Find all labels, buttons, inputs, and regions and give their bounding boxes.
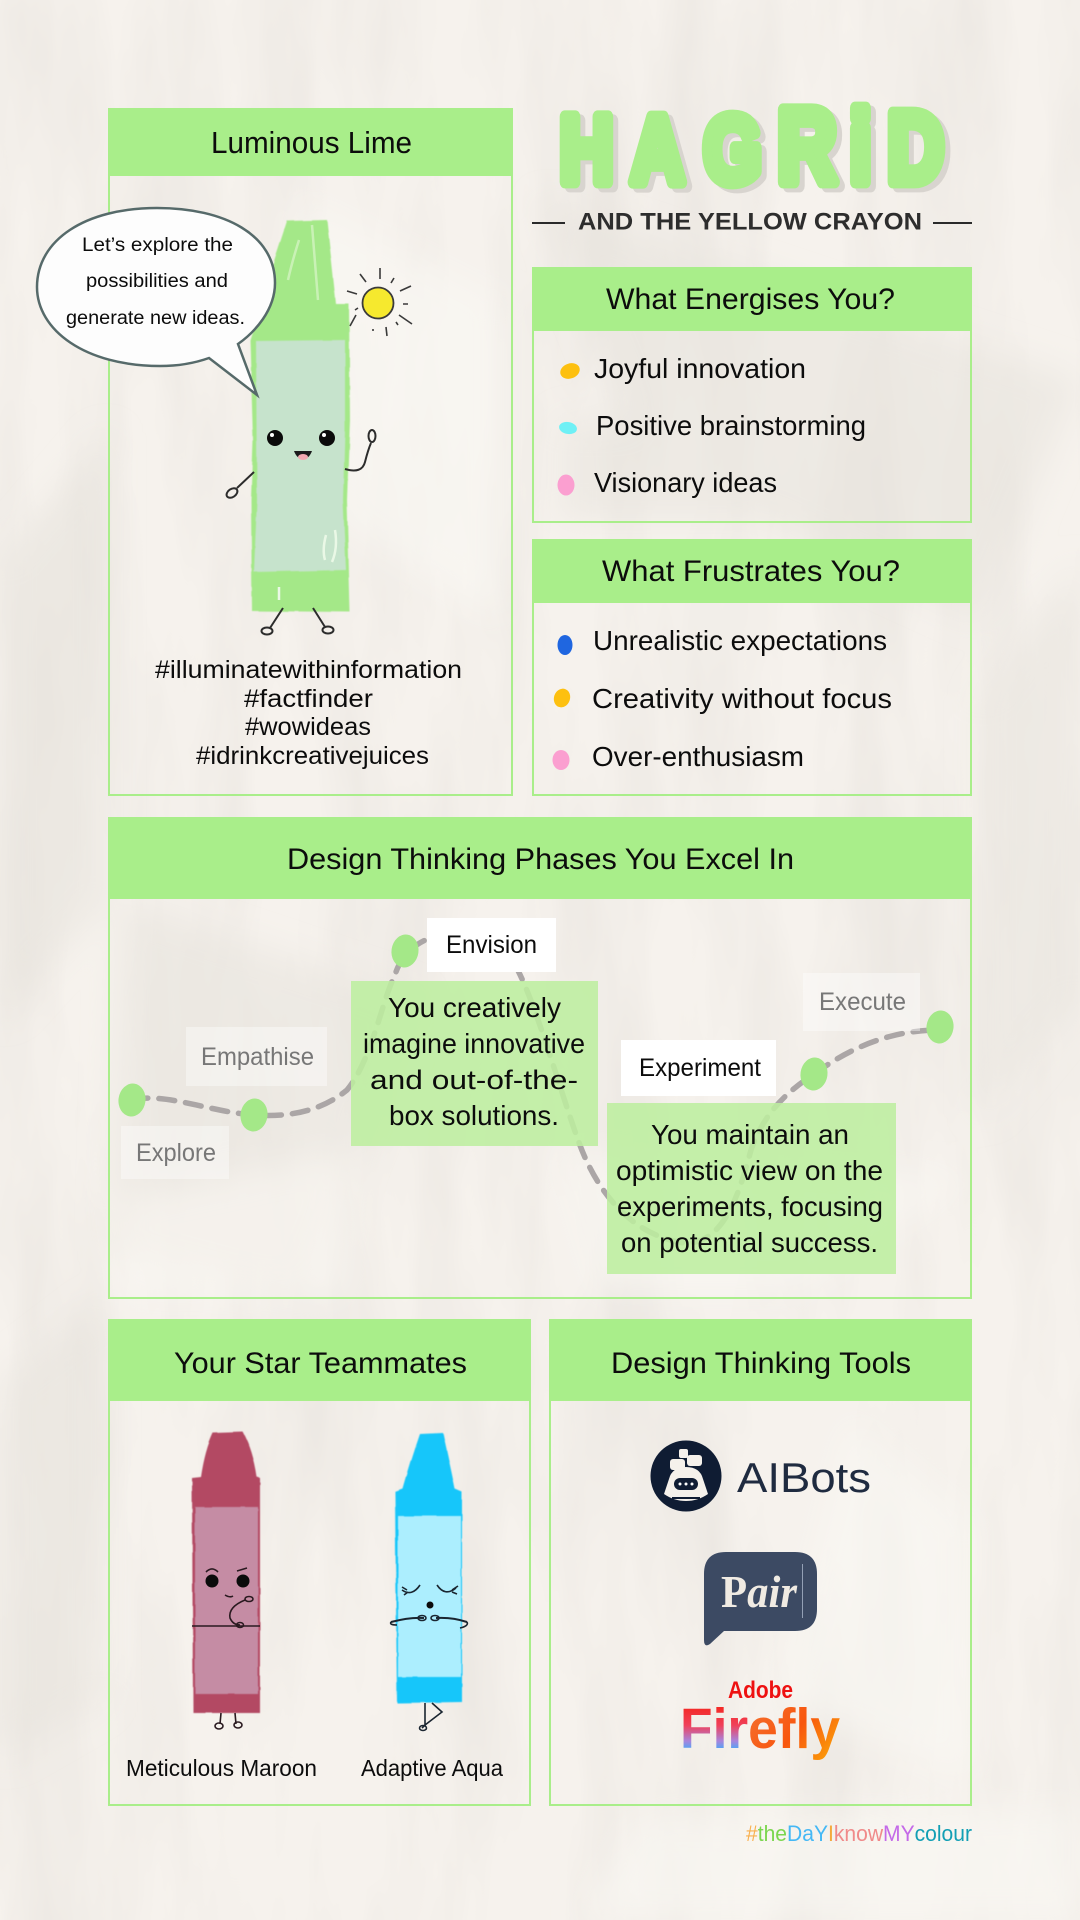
heading: tools [549,1319,972,1401]
text block: experiment description: You maintain an [651,1119,849,1150]
step: Experiment [621,1040,830,1096]
heading: energises [532,267,972,331]
panel: What Frustrates You [532,539,972,795]
text block: envision description: imagine innovative [363,1028,585,1059]
heading: energises: What Energises You? [606,283,895,316]
title: HAGRiD: R [777,87,837,204]
panel: Your Star Teammates [108,1319,531,1805]
logo: AIBots [650,1440,871,1512]
title: HAGRiD: i [849,91,872,204]
title: HAGRiD: G [704,97,761,203]
step: Execute [803,973,956,1045]
step: Envision [389,918,556,972]
callout: speech bubble: possibilities and [86,271,228,292]
character: lime crayon [225,220,376,634]
list: frustrates items [551,625,892,772]
logo: Adobe Firefly: Adobe [728,1677,793,1704]
logo: Pair: Pair [721,1566,798,1617]
list: energises items: Positive brainstorming [596,410,866,441]
logo: Pair [704,1552,817,1645]
heading: frustrates [532,539,972,603]
logo: AIBots: AIBots [737,1454,871,1501]
list: energises items: Joyful innovation [594,353,806,384]
title: HAGRiD: H [560,97,613,203]
text block: envision description: and out-of-the- [370,1065,578,1095]
step: Explore [116,1082,229,1179]
text block: hashtags: #idrinkcreativejuices [196,742,429,770]
text block: envision description: box solutions. [389,1100,559,1131]
heading: tools: Design Thinking Tools [611,1347,911,1380]
list: energises items: Visionary ideas [594,467,777,498]
title: HAGRiD [560,87,944,204]
character: aqua crayon [391,1433,467,1730]
callout: speech bubble: Let’s explore the [82,235,233,256]
step: Empathise: Empathise [201,1043,314,1071]
chart: dashed journey path [132,938,940,1243]
list: frustrates items: Unrealistic expectations [593,625,887,656]
text block: hashtags: #wowideas [245,713,371,741]
heading: design thinking phases: Design Thinking Phases You Excel In [287,843,794,876]
callout: speech bubble [37,208,275,395]
step: Execute: Execute [819,988,906,1016]
footer hashtag: #theDaYIknowMYcolour [746,1821,972,1846]
step: Envision: Envision [446,931,537,959]
text block: experiment description [607,1103,896,1274]
heading: star teammates [108,1319,531,1401]
character: maroon crayon [192,1432,260,1729]
heading: star teammates: Your Star Teammates [174,1347,467,1380]
panel: Luminous Lime [37,108,513,795]
heading: design thinking phases [108,817,972,899]
label: Meticulous Maroon: Meticulous Maroon [126,1755,317,1781]
label: Adaptive Aqua: Adaptive Aqua [361,1755,503,1781]
text block: experiment description: on potential success. [621,1227,878,1258]
icon: sun [347,268,412,336]
heading: Luminous Lime: Luminous Lime [211,125,412,160]
title: HAGRiD: A [631,97,684,203]
logo: Adobe Firefly: Firefly [680,1697,840,1761]
heading: frustrates: What Frustrates You? [602,555,900,588]
text block: hashtags [155,656,462,770]
callout: speech bubble: generate new ideas. [66,308,245,329]
text block: hashtags: #illuminatewithinformation [155,656,462,684]
step: Explore: Explore [136,1139,216,1167]
panel: What Energises You [532,267,972,522]
list: frustrates items: Over-enthusiasm [592,741,804,772]
list: frustrates items: Creativity without focus [592,683,892,714]
text block: envision description [351,981,598,1146]
heading: Luminous Lime [108,108,513,176]
step: Empathise [186,1027,327,1133]
subtitle: AND THE YELLOW CRAYON [578,208,922,236]
text block: experiment description: experiments, focusing [617,1191,883,1222]
text block: hashtags: #factfinder [244,685,373,713]
text block: envision description: You creatively [388,992,561,1023]
text block: experiment description: optimistic view on the [616,1155,883,1186]
panel: Design Thinking Phases [108,817,972,1298]
panel: Design Thinking Tools [549,1319,972,1805]
step: Experiment: Experiment [639,1054,761,1082]
title: HAGRiD: D [887,92,944,203]
list: energises items [558,353,866,498]
